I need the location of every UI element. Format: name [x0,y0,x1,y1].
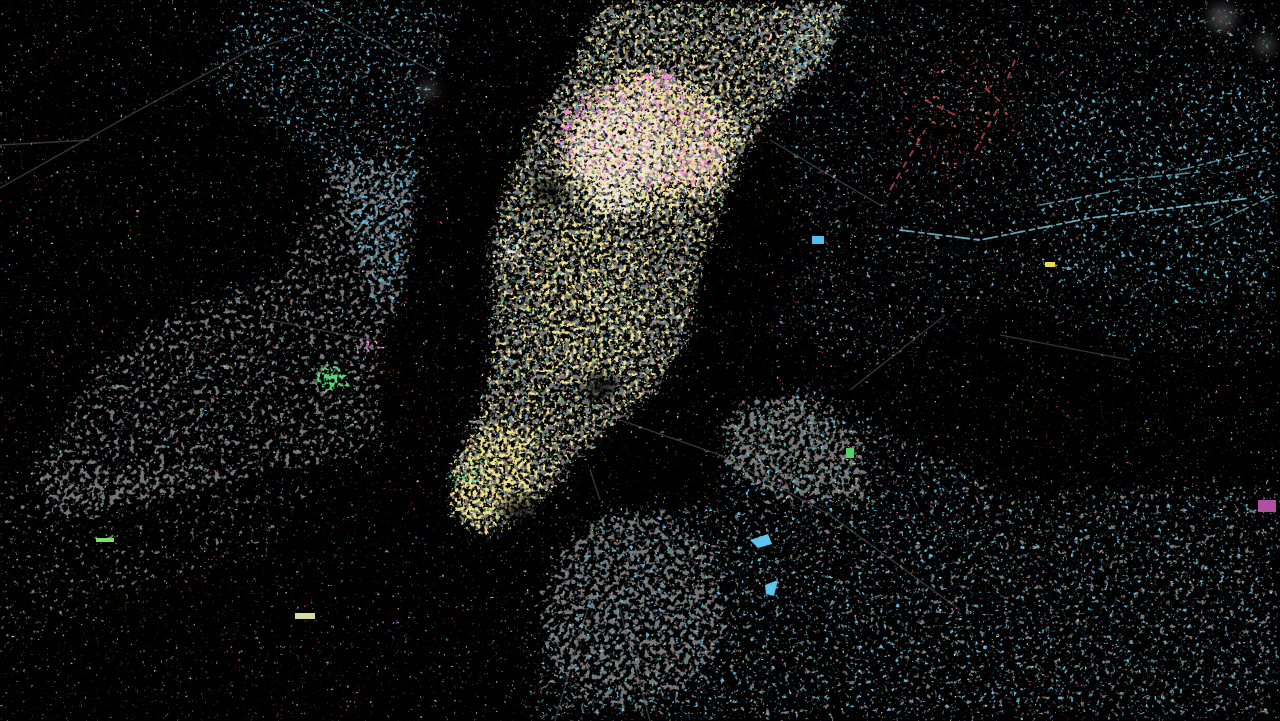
grey blurred clusters [420,5,1274,98]
pink dot layer [350,0,850,540]
green dot layer [312,0,870,540]
yellow dot layer [448,0,1080,540]
streaks of cyan in Queens [900,150,1275,240]
dark holes of parks and rivers [500,178,616,522]
hand-placed highlighted blotches [96,60,1276,619]
red dot layer [448,0,1030,540]
